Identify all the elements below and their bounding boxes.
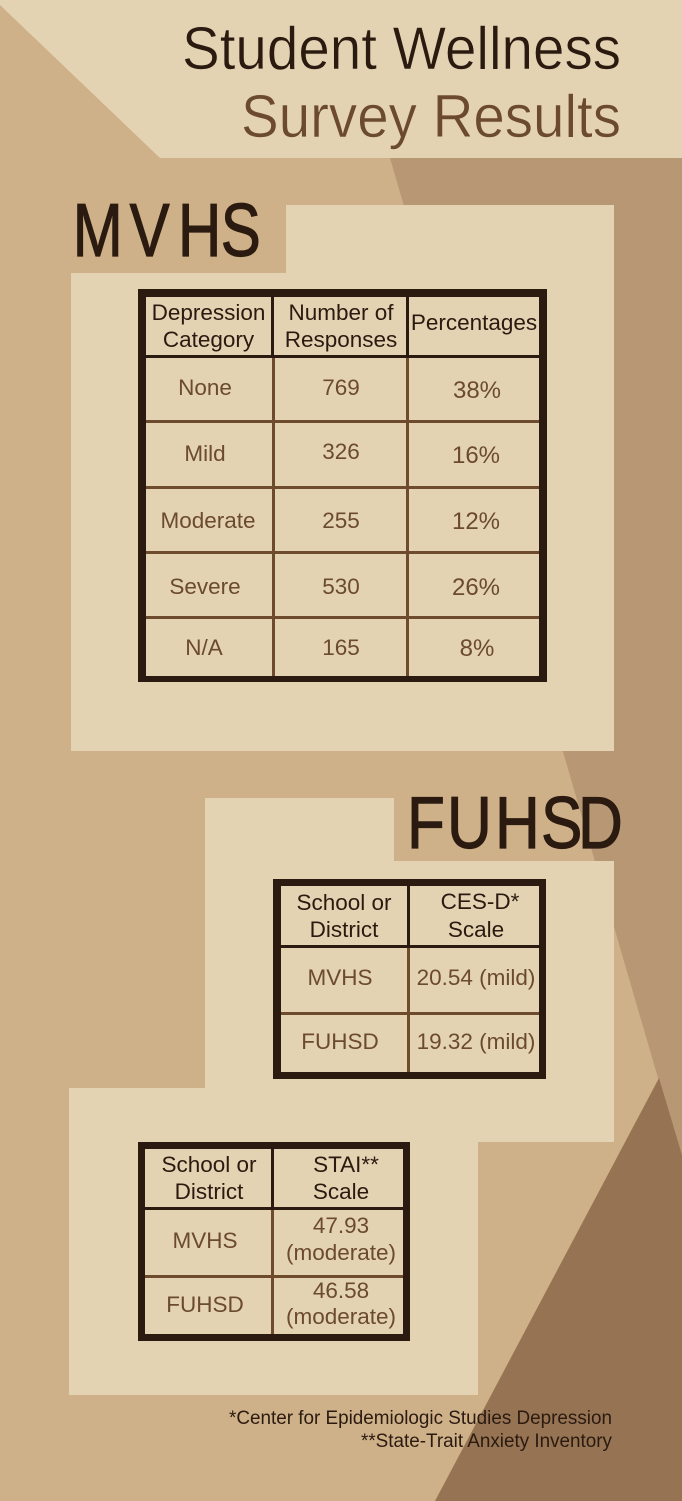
row: MVHS: MVHS [307, 965, 373, 990]
row: Severe: 530 [322, 574, 360, 599]
table header row: CES-D* [441, 889, 520, 914]
row: Moderate [160, 508, 500, 535]
table header row: School or [161, 1152, 257, 1177]
row: None [178, 375, 501, 404]
title line 1: Student Wellness [182, 15, 621, 82]
row: MVHS: 20.54 (mild) [417, 965, 535, 990]
title line 2: Survey Results [241, 83, 621, 150]
row: MVHS: (moderate) [286, 1240, 396, 1265]
background: dark brown triangle [435, 1078, 682, 1501]
row: FUHSD: FUHSD [301, 1029, 379, 1054]
row: Moderate: 255 [322, 508, 360, 533]
table header row [296, 889, 520, 942]
row: FUHSD: 46.58 [313, 1278, 369, 1303]
row: MVHS [307, 965, 535, 990]
table: MVHS depression categories [138, 289, 547, 682]
table header row [152, 300, 537, 352]
table grid lines [138, 1142, 410, 1341]
table header row: Category [163, 327, 255, 352]
row: FUHSD: FUHSD [166, 1292, 244, 1317]
table: STAI scale [138, 1142, 410, 1341]
background: medium brown diagonal shape [390, 158, 682, 1155]
table header row: Percentages [411, 310, 537, 335]
row: Mild [184, 439, 500, 469]
row: None: 38% [453, 377, 501, 404]
table header row [161, 1152, 379, 1204]
row: MVHS [172, 1213, 396, 1265]
table grid lines [273, 879, 546, 1079]
row: Severe [169, 574, 500, 601]
row: Moderate: 12% [452, 508, 500, 535]
table grid lines [138, 289, 547, 682]
row: N/A: 165 [322, 635, 360, 660]
title [182, 15, 621, 150]
row: MVHS: MVHS [172, 1228, 238, 1253]
row: Severe: 26% [452, 574, 500, 601]
row: Mild: 16% [452, 442, 500, 469]
panel: MVHS background [71, 205, 614, 751]
row: MVHS: 47.93 [313, 1213, 369, 1238]
footnotes [229, 1408, 612, 1452]
footnote: CES-D: *Center for Epidemiologic Studies Depression [229, 1408, 612, 1429]
heading: FUHSD: FUHSD [407, 783, 623, 864]
row: FUHSD [166, 1278, 396, 1329]
row: Severe: Severe [169, 574, 241, 599]
table: CES-D scale [273, 879, 546, 1079]
row: N/A: N/A [185, 635, 223, 660]
table header row: School or [296, 890, 392, 915]
table header row: Scale [448, 917, 504, 942]
table header row: Responses [285, 327, 397, 352]
row: Mild: Mild [184, 441, 226, 466]
table header row: STAI** [313, 1152, 379, 1177]
table header row: District [175, 1179, 244, 1204]
table header row: Depression [152, 300, 265, 325]
row: Moderate: Moderate [160, 508, 256, 533]
panel: FUHSD background [69, 798, 614, 1395]
row: None: 769 [322, 375, 360, 400]
row: None: None [178, 375, 232, 400]
row: FUHSD: 19.32 (mild) [417, 1029, 535, 1054]
footnote: STAI: **State-Trait Anxiety Inventory [361, 1431, 612, 1452]
table header row: Number of [288, 300, 394, 325]
row: N/A [185, 635, 494, 662]
row: N/A: 8% [460, 635, 494, 662]
row: FUHSD: (moderate) [286, 1304, 396, 1329]
title banner [0, 0, 682, 158]
row: Mild: 326 [322, 439, 360, 464]
heading: MVHS: MVHS [73, 190, 261, 273]
row: FUHSD [301, 1029, 535, 1054]
table header row: Scale [313, 1179, 369, 1204]
table header row: District [310, 917, 379, 942]
